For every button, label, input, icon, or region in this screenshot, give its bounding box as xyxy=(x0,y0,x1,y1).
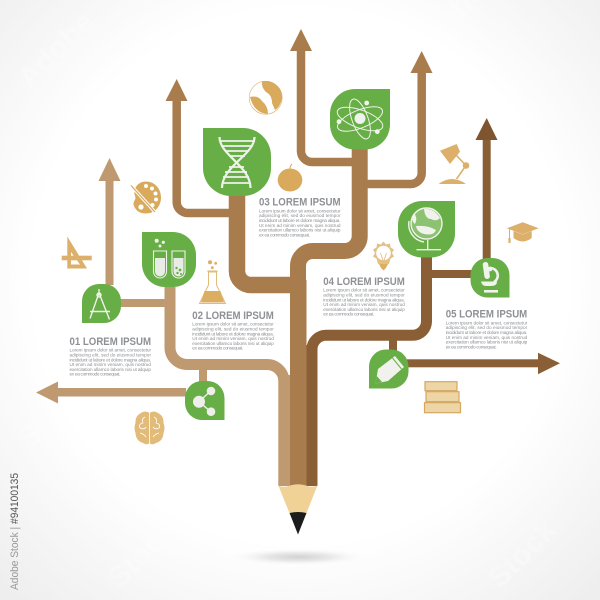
pencil shadow xyxy=(226,548,370,566)
arrow: up right xyxy=(410,51,432,73)
text block 02: Lorem ipsum dolor sit amet, consectetur xyxy=(192,322,274,327)
icon: apple xyxy=(278,164,302,192)
text block 02: adipiscing elit, sed do eiusmod tempor xyxy=(192,326,274,332)
icon: DNA helix xyxy=(220,137,254,188)
icon: earth globe xyxy=(249,81,282,114)
text block 05: Ut enim ad minim veniam, quis nostrud xyxy=(446,335,528,340)
arrow: up left xyxy=(98,158,120,181)
icon: brain xyxy=(134,412,164,444)
text block 02: Ut enim ad minim veniam, quis nostrud xyxy=(192,336,274,341)
icon: set square and ruler xyxy=(62,236,92,268)
watermark text: Adobe xyxy=(12,6,101,95)
text block 03: ex ea commodo consequat. xyxy=(259,232,310,237)
leaf 04: atom xyxy=(330,89,390,150)
text block 04: adipiscing elit, sed do eiusmod tempor xyxy=(323,292,405,298)
text block 05: 05 LOREM IPSUM xyxy=(446,309,527,321)
text block 02: exercitation ullamco laboris nisi ut aliquip xyxy=(192,341,274,346)
arrow: left xyxy=(36,382,58,404)
text block 05: incididunt ut labore et dolore magna aliqua. xyxy=(446,330,527,335)
watermark text: Stock xyxy=(412,404,493,485)
pencil trunk xyxy=(278,280,318,534)
watermark text: Stock xyxy=(102,514,183,595)
text block 02: ex ea commodo consequat. xyxy=(192,346,243,351)
branch 05: dark brown with arrows xyxy=(312,118,560,486)
text block 01: ex ea commodo consequat. xyxy=(70,372,120,377)
text block 05: exercitation ullamco laboris nisi ut aliquip xyxy=(446,340,528,345)
leaf 05b: microscope xyxy=(470,258,510,298)
text block 05: Lorem ipsum dolor sit amet, consectetur xyxy=(446,320,528,325)
text block 01: incididunt ut labore et dolore magna aliqua. xyxy=(70,357,151,362)
text block 01: Lorem ipsum dolor sit amet, consectetur xyxy=(70,348,151,353)
text block 04: 04 LOREM IPSUM xyxy=(323,276,405,288)
icon: stack of books xyxy=(424,382,460,413)
pencil lead xyxy=(290,512,306,534)
text block 01: Ut enim ad minim veniam, quis nostrud xyxy=(70,362,151,367)
text block 05 xyxy=(446,309,528,349)
text block 05: ex ea commodo consequat. xyxy=(446,344,497,349)
watermark text: Stock xyxy=(12,374,93,455)
leaf 02: test tubes xyxy=(142,232,196,287)
text block 03: 03 LOREM IPSUM xyxy=(259,197,340,209)
text block 02: incididunt ut labore et dolore magna aliqua. xyxy=(192,331,274,336)
icon: pencil xyxy=(376,356,404,384)
text block 04: Ut enim ad minim veniam, quis nostrud xyxy=(323,302,405,307)
text block 03: exercitation ullamco laboris nisi ut aliquip xyxy=(259,228,341,233)
arrow: up far right xyxy=(476,118,498,140)
leaf 01: compass xyxy=(82,284,121,323)
pencil wood tip xyxy=(278,484,317,513)
branch 03-04: medium brown with arrows xyxy=(166,29,432,486)
arrow: right xyxy=(538,353,560,374)
text block 04: exercitation ullamco laboris nisi ut aliquip xyxy=(323,307,405,312)
text block 01 xyxy=(70,336,151,377)
text block 03: incididunt ut labore et dolore magna aliqua. xyxy=(259,218,340,223)
branch 01-02: light brown with arrows xyxy=(36,158,284,486)
text block 03 xyxy=(259,197,341,237)
text block 01: 01 LOREM IPSUM xyxy=(70,336,151,348)
text block 04: incididunt ut labore et dolore magna aliqua. xyxy=(323,297,405,302)
arrow: up DNA xyxy=(166,79,188,101)
text block 03: Lorem ipsum dolor sit amet, consectetur xyxy=(259,208,341,213)
icon: graduation cap xyxy=(507,222,539,243)
watermark text: Stock xyxy=(482,514,563,595)
icon: atom xyxy=(334,97,386,141)
text block 01: exercitation ullamco laboris nisi ut aliquip xyxy=(70,367,151,372)
text block 01: adipiscing elit, sed do eiusmod tempor xyxy=(70,352,151,358)
text block 03: Ut enim ad minim veniam, quis nostrud xyxy=(259,223,341,228)
leaf 03: DNA xyxy=(203,128,271,196)
text block 02: 02 LOREM IPSUM xyxy=(192,310,274,322)
icon: test tubes xyxy=(154,239,185,278)
icon: light bulb xyxy=(373,242,394,270)
text block 04: ex ea commodo consequat. xyxy=(323,312,374,317)
icon: drawing compass xyxy=(90,289,110,320)
leaf 05c: pencil xyxy=(369,350,408,388)
icon: share nodes xyxy=(193,387,215,416)
text block 03: adipiscing elit, sed do eiusmod tempor xyxy=(259,213,341,218)
watermark text: Stock xyxy=(482,114,563,195)
leaf 05a: globe xyxy=(398,201,455,258)
icon: desk globe xyxy=(409,208,442,250)
icon: desk lamp xyxy=(438,144,469,184)
text block 04: Lorem ipsum dolor sit amet, consectetur xyxy=(323,288,405,293)
icon: paint palette xyxy=(131,182,161,214)
leaf 01b: share xyxy=(185,381,224,420)
icon: microscope xyxy=(481,262,498,293)
image id caption: Adobe Stock | #94100135 xyxy=(9,473,21,590)
arrow: up centre xyxy=(290,29,312,51)
text block 04 xyxy=(323,276,405,317)
text block 05: adipiscing elit, sed do eiusmod tempor xyxy=(446,325,528,330)
text block 02 xyxy=(192,310,274,351)
icon: flask xyxy=(200,260,226,304)
